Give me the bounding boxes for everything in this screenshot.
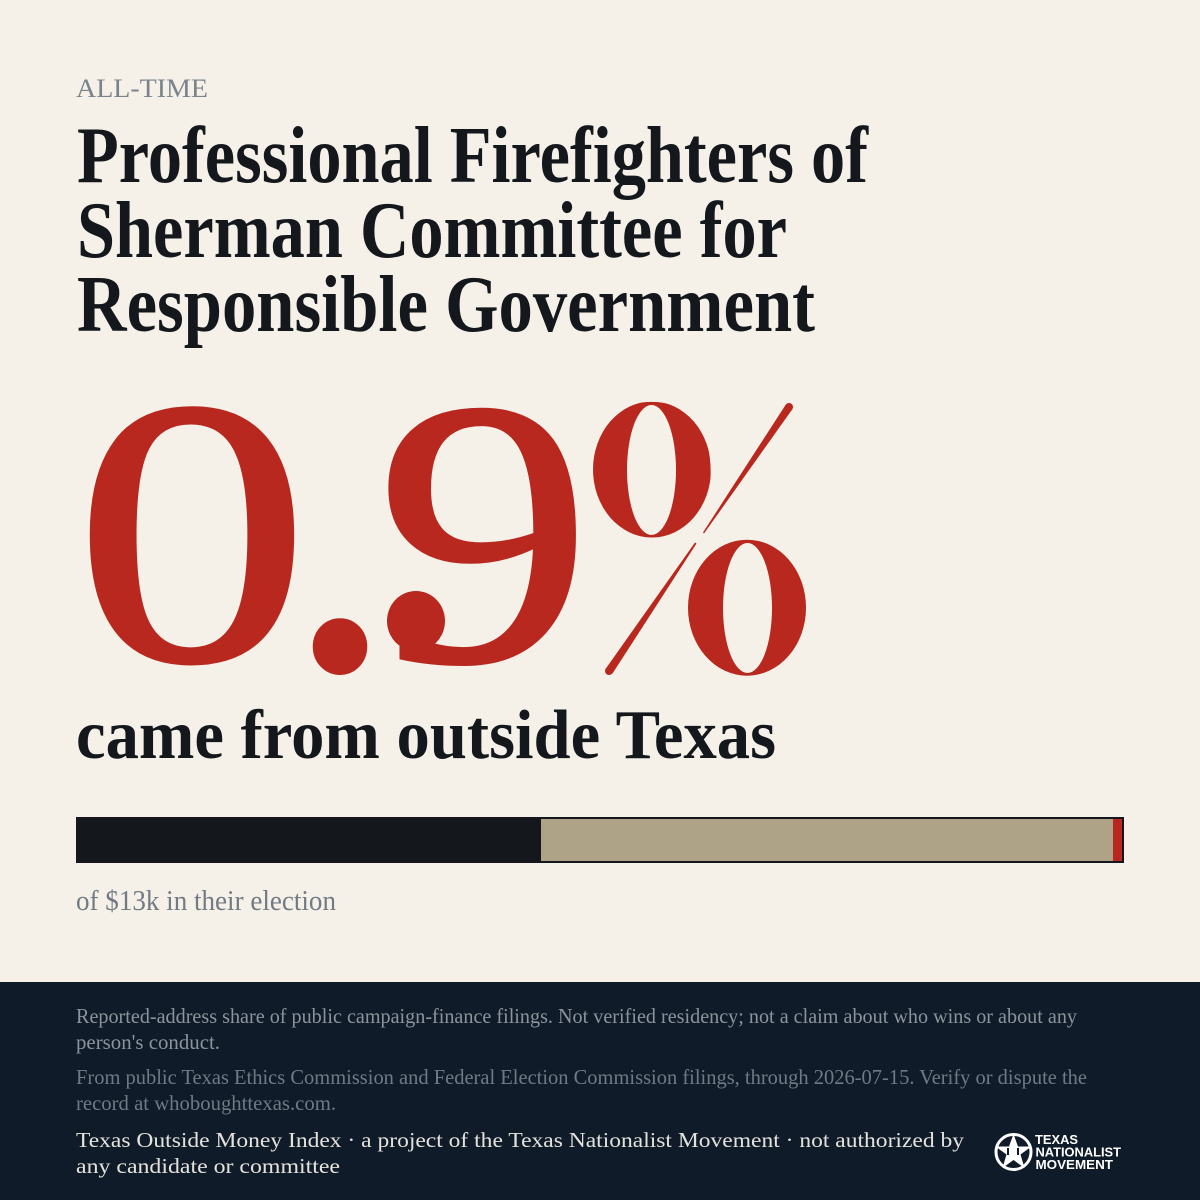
attribution: Texas Outside Money Index · a project of the Texas Nationalist Movement · not authorized by [76, 1128, 965, 1152]
attribution: any candidate or committee [76, 1154, 340, 1178]
attribution [76, 1128, 965, 1178]
source note: From public Texas Ethics Commission and Federal Election Commission filings, through 2026-07-15. Verify or dispute the [76, 1065, 1087, 1089]
title: Sherman Committee for [77, 187, 787, 275]
footer panel [0, 982, 1200, 1200]
logo: Texas Nationalist Movement: TEXAS [1035, 1132, 1078, 1147]
disclaimer [76, 1004, 1077, 1054]
logo: Texas Nationalist Movement: NATIONALIST [1036, 1144, 1121, 1160]
big percentage: 0 [74, 323, 310, 742]
big percentage: . [298, 359, 382, 747]
big percentage [90, 402, 806, 676]
big percentage: % [553, 311, 928, 759]
bar caption: of $13k in their election [76, 886, 336, 917]
disclaimer: Reported-address share of public campaign-finance filings. Not verified residency; not a claim about who wins or about any [76, 1004, 1077, 1028]
eyebrow label: ALL-TIME [76, 74, 208, 103]
source note [76, 1065, 1087, 1115]
logo: Texas Nationalist Movement: MOVEMENT [1036, 1157, 1113, 1172]
source note: record at whoboughttexas.com. [76, 1091, 336, 1115]
big percentage: 9 [376, 323, 592, 743]
stacked bar [76, 817, 1124, 863]
subtitle: came from outside Texas [76, 697, 776, 774]
title: Responsible Government [77, 261, 815, 349]
disclaimer: person's conduct. [76, 1030, 220, 1054]
logo: Texas Nationalist Movement [996, 1132, 1121, 1172]
title: Professional Firefighters of [77, 112, 869, 200]
title [77, 112, 869, 349]
